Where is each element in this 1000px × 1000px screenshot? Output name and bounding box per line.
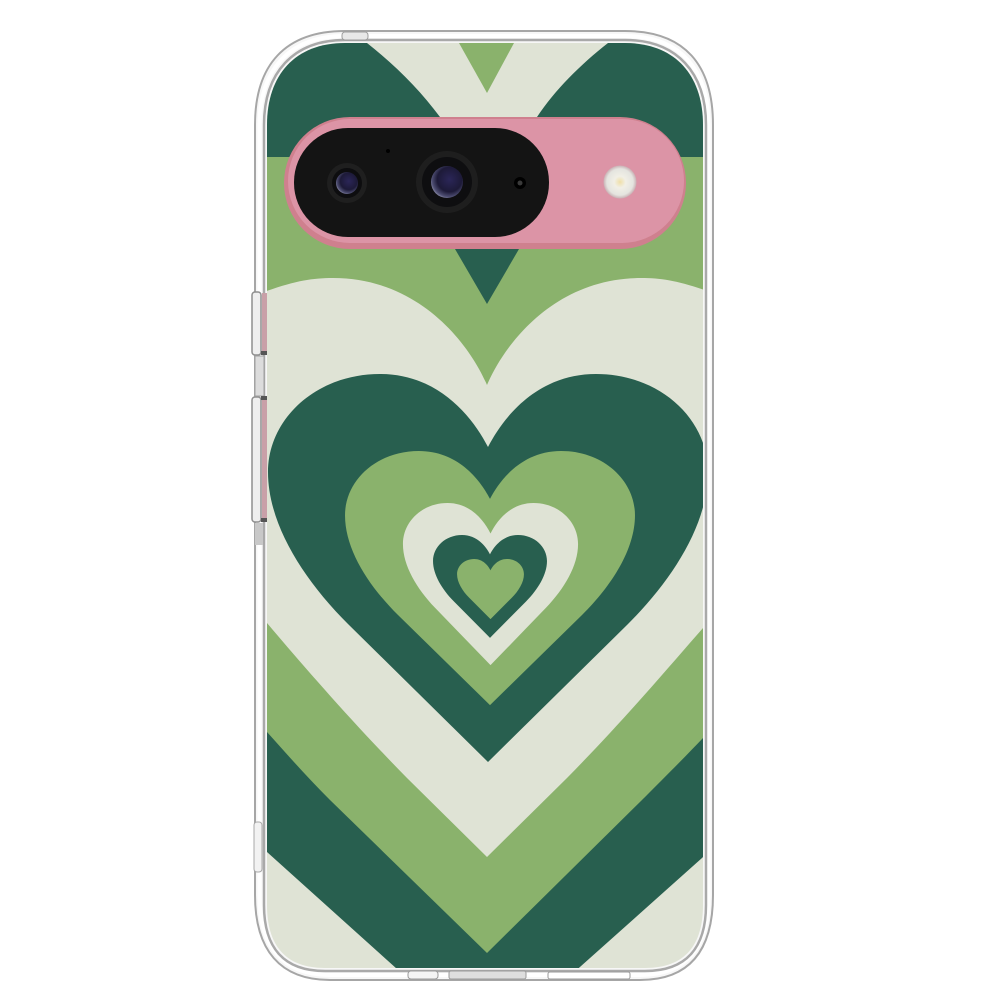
innermost light green heart	[457, 559, 524, 619]
left camera lens	[327, 163, 367, 203]
main dark green heart	[268, 374, 708, 762]
black lens window	[294, 128, 549, 237]
pink camera housing	[284, 117, 686, 249]
background cream band	[260, 40, 710, 975]
light green heart	[345, 451, 635, 705]
large cream heart	[267, 278, 703, 857]
main camera lens	[416, 151, 478, 213]
top green triangle	[459, 43, 514, 93]
phone case illustration	[251, 30, 714, 981]
depth sensor	[514, 177, 526, 189]
flash	[604, 166, 636, 198]
transparent case shell	[255, 31, 713, 980]
outer light green heart band	[267, 157, 703, 953]
small dark green heart	[433, 535, 547, 638]
top case notch	[342, 32, 368, 40]
camera bar	[284, 117, 686, 249]
outer dark green heart band	[267, 43, 703, 968]
side buttons	[252, 292, 267, 872]
printed back panel	[267, 43, 703, 968]
small cream heart	[403, 503, 578, 665]
microphone dot	[386, 149, 390, 153]
bottom case ports	[408, 971, 630, 979]
